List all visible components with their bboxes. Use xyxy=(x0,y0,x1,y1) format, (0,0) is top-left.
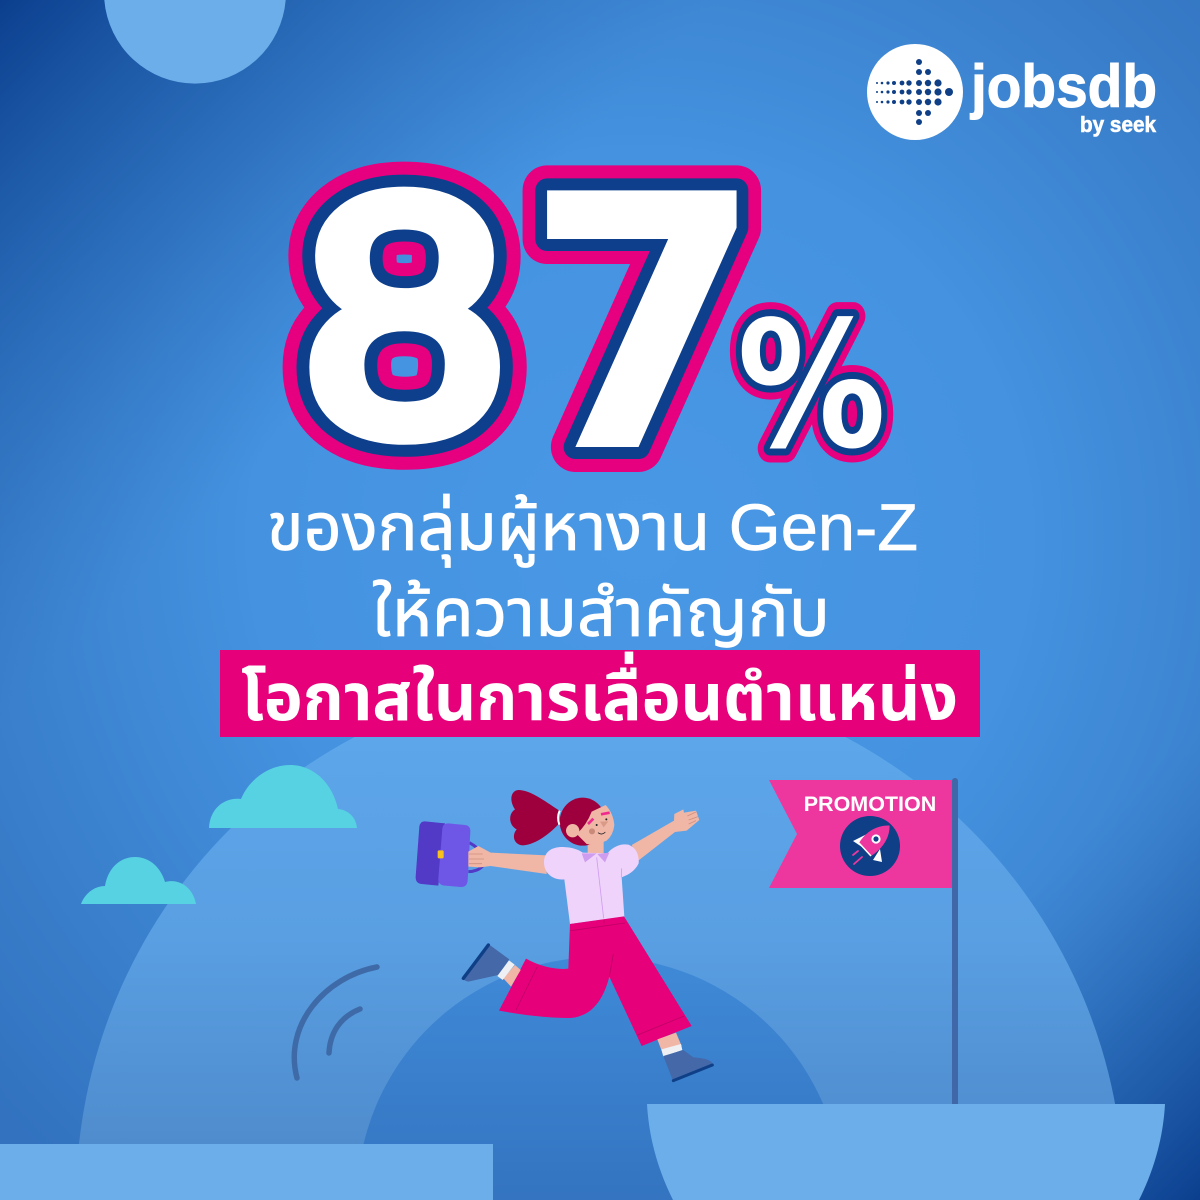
jumping woman with briefcase xyxy=(416,790,713,1082)
motion arcs xyxy=(294,967,377,1078)
big number 87% xyxy=(305,122,886,531)
back leg and shoe xyxy=(462,944,521,987)
trousers xyxy=(499,916,692,1046)
logo badge with dotted arrow xyxy=(867,44,963,140)
digit 8: 8 xyxy=(305,128,504,502)
front leg and shoe xyxy=(657,1033,713,1082)
hair back xyxy=(560,798,606,846)
briefcase xyxy=(416,821,470,887)
neck xyxy=(588,838,604,857)
flag label: PROMOTION xyxy=(804,792,936,816)
percent sign: % xyxy=(737,284,886,488)
percent sign: % xyxy=(737,284,886,488)
ponytail xyxy=(510,790,559,845)
right arm and hand xyxy=(632,809,699,861)
logo wordmark: jobsdb xyxy=(970,53,1157,120)
digit 7: 7 xyxy=(524,122,764,531)
digit 8: 8 xyxy=(305,128,504,502)
logo xyxy=(867,44,1157,140)
top circle decoration xyxy=(104,0,286,84)
left arm and hand xyxy=(468,846,547,874)
inner hill xyxy=(357,957,843,1200)
digit 7: 7 xyxy=(524,122,764,531)
digit 8: 8 xyxy=(305,128,504,502)
large hill xyxy=(76,676,1124,1200)
platform right xyxy=(647,1104,1165,1200)
percent sign: % xyxy=(737,284,886,488)
shirt xyxy=(544,844,639,924)
headline line 2: ให้ความสำคัญกับ xyxy=(372,576,830,651)
highlight banner: โอกาสในการเลื่อนตำแหน่ง xyxy=(241,651,958,734)
cloud 1 xyxy=(209,765,357,828)
cloud 2 xyxy=(81,857,196,904)
briefcase handle xyxy=(468,843,484,872)
face xyxy=(577,805,614,845)
promotion flag xyxy=(769,780,952,888)
logo tagline: by seek xyxy=(1080,112,1157,137)
digit 7: 7 xyxy=(524,122,764,531)
flag pole xyxy=(952,778,958,1108)
rocket badge xyxy=(840,816,900,876)
headline line 1: ของกลุ่มผู้หางาน Gen-Z xyxy=(267,490,918,568)
platform left xyxy=(0,1144,493,1200)
